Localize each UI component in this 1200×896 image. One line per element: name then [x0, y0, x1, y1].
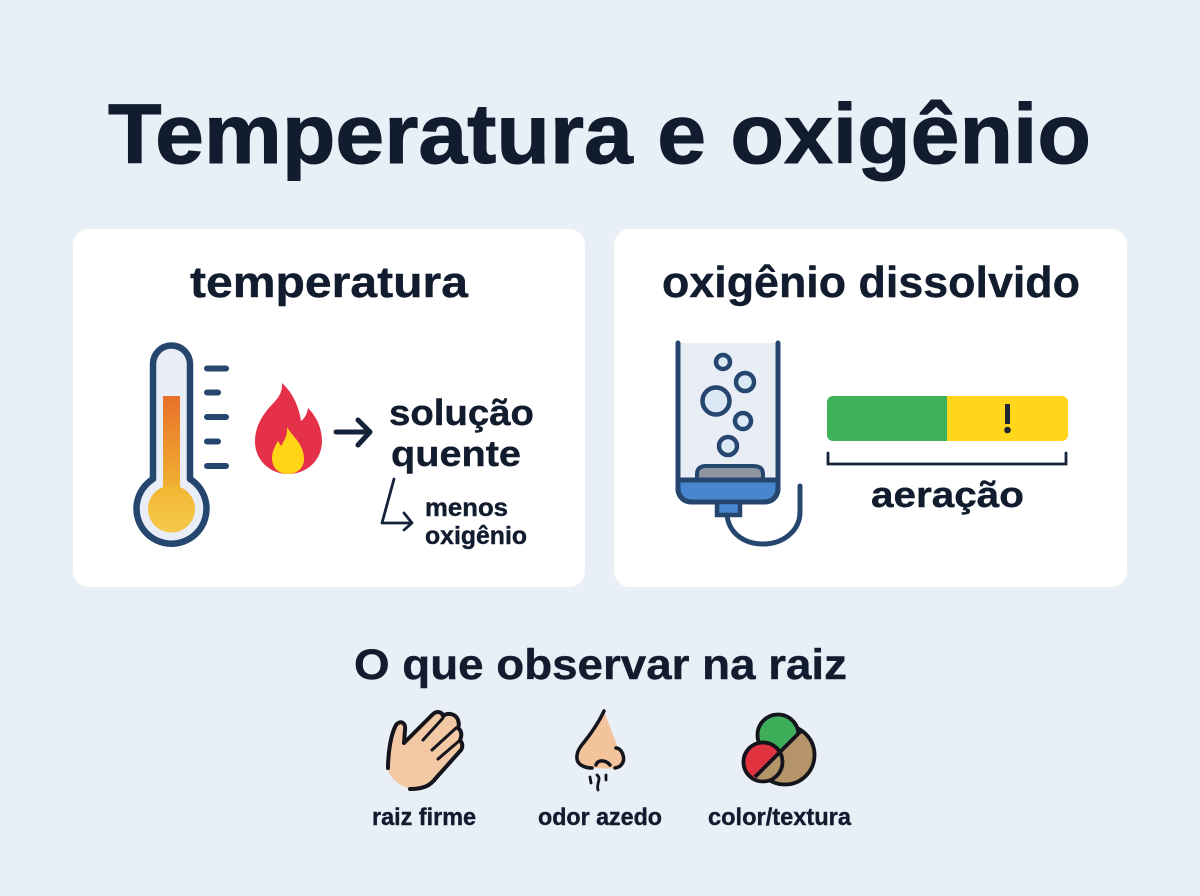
icon: flame — [255, 383, 322, 474]
heading: O que observar na raiz: O que observar na raiz — [354, 641, 847, 689]
icon: warning mark — [1004, 404, 1011, 433]
heading: oxigênio dissolvido: oxigênio dissolvido — [662, 258, 1080, 307]
icon: thermometer — [136, 346, 226, 544]
arrow: to less oxygen — [382, 479, 412, 530]
text: solução quente: solução — [389, 392, 534, 433]
icon: hand — [387, 712, 462, 789]
chart: aeration level bar — [827, 396, 1068, 441]
text: menos oxigênio: menos — [425, 494, 508, 522]
item: color/textura — [708, 714, 852, 831]
label: odor azedo: odor azedo — [538, 804, 662, 831]
icon: aeration tank — [678, 343, 800, 544]
panel: oxigênio dissolvido — [614, 229, 1127, 587]
icon: color swatches — [744, 714, 814, 784]
text: solução quente: quente — [391, 433, 521, 474]
icon: nose — [577, 711, 624, 790]
label: aeração: aeração — [871, 474, 1024, 515]
bracket: aeration range — [828, 453, 1066, 464]
panel: temperatura — [73, 229, 585, 587]
item: raiz firme — [372, 712, 476, 831]
text: menos oxigênio — [425, 494, 527, 550]
text: menos oxigênio: oxigênio — [425, 522, 527, 550]
item: odor azedo — [538, 711, 662, 831]
label: color/textura: color/textura — [708, 804, 852, 831]
label: raiz firme: raiz firme — [372, 804, 476, 831]
heading: temperatura: temperatura — [190, 258, 469, 307]
text: solução quente — [389, 392, 534, 474]
arrow: flame to hot solution — [336, 420, 370, 445]
title: Temperatura e oxigênio — [108, 87, 1091, 181]
